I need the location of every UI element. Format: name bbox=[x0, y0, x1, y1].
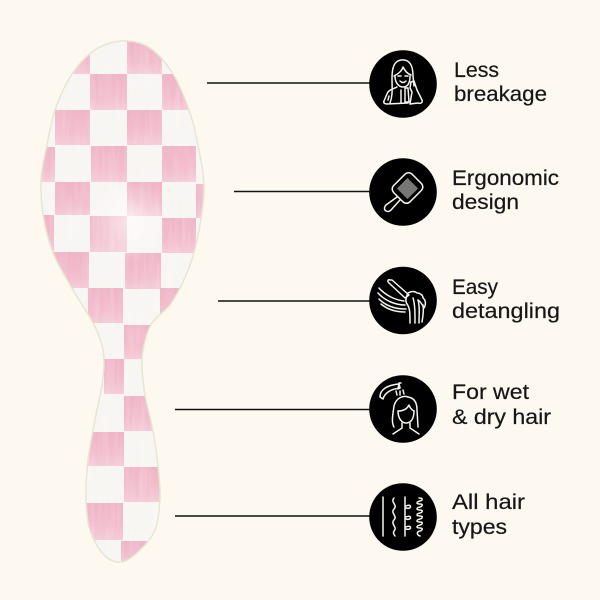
icon: combing tangled hair bbox=[369, 267, 437, 334]
label: easy detangling bbox=[452, 276, 560, 323]
leader line: less breakage bbox=[207, 82, 372, 84]
label: ergonomic design bbox=[452, 167, 559, 214]
leader line: all hair types bbox=[175, 515, 372, 517]
label: ergonomic design: Ergonomic bbox=[452, 167, 559, 190]
label: easy detangling: detangling bbox=[452, 300, 560, 323]
label: less breakage bbox=[454, 59, 547, 106]
brush illustration bbox=[40, 40, 205, 563]
label: for wet and dry hair: For wet bbox=[452, 381, 529, 404]
label: all hair types bbox=[452, 491, 525, 539]
leader line: easy detangling bbox=[218, 300, 372, 302]
icon: paddle brush bbox=[369, 158, 437, 226]
label: for wet and dry hair: & dry hair bbox=[452, 406, 551, 429]
icon: shower and woman bbox=[369, 375, 437, 443]
label: less breakage: Less bbox=[454, 59, 499, 82]
leader line: ergonomic design bbox=[234, 190, 372, 192]
label: for wet and dry hair bbox=[452, 381, 551, 429]
icon: woman brushing hair bbox=[369, 50, 437, 118]
label: ergonomic design: design bbox=[452, 191, 519, 214]
label: less breakage: breakage bbox=[454, 83, 547, 106]
label: all hair types: All hair bbox=[452, 491, 525, 514]
label: all hair types: types bbox=[452, 516, 507, 539]
icon: hair types bbox=[369, 483, 437, 551]
leader line: wet and dry hair bbox=[175, 408, 372, 410]
label: easy detangling: Easy bbox=[452, 276, 498, 299]
